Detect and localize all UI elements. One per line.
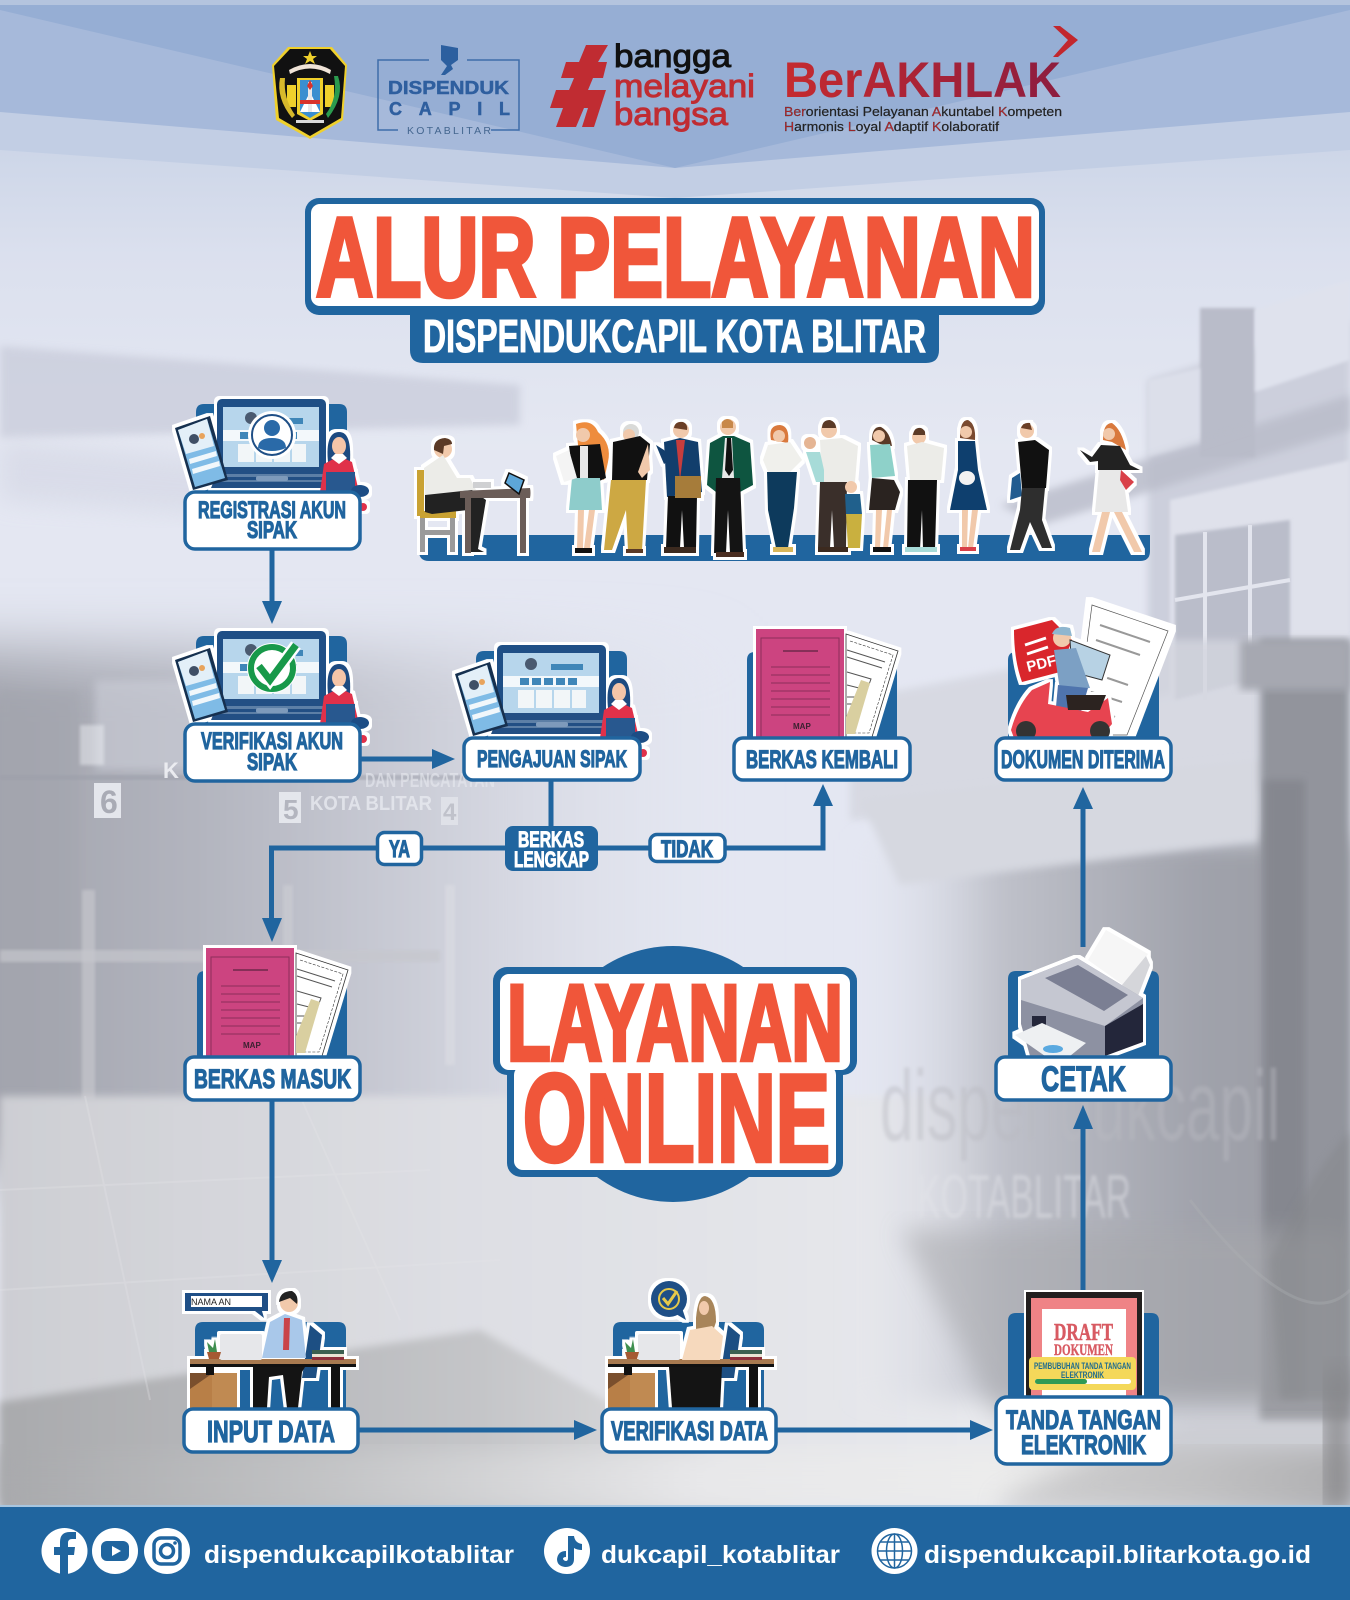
card label xyxy=(185,1057,360,1100)
logo: bangga melayani bangsa: bangga xyxy=(614,38,731,74)
icon: draft document xyxy=(1024,1290,1144,1396)
queue floor bar xyxy=(419,535,1150,561)
backing panel xyxy=(195,1322,346,1409)
person: woman with orange hair xyxy=(556,422,609,553)
icon: folder and papers xyxy=(206,948,348,1056)
background: service counter signs: 4 xyxy=(443,799,457,826)
step: verifikasi akun sipak xyxy=(175,631,369,781)
footer bar xyxy=(0,1505,1350,1600)
logo: BerAKHLAK xyxy=(784,26,1078,134)
person: man in green jacket xyxy=(707,419,753,557)
icon: folder and papers: MAP xyxy=(243,1041,261,1050)
step: input data xyxy=(184,1291,358,1452)
queue scene xyxy=(417,419,1150,561)
icon: tiktok xyxy=(544,1528,590,1574)
card label: REGISTRASI AKUN xyxy=(198,497,346,524)
logo: Dispenduk Capil: KOTABLITAR xyxy=(407,125,491,137)
card label xyxy=(185,492,360,549)
icon: laptop, phone and woman xyxy=(175,631,369,743)
backing panel xyxy=(1008,652,1159,738)
decision: berkas lengkap: BERKAS xyxy=(518,827,584,852)
background: service counter signs: DAN PENCATATAN xyxy=(365,770,495,792)
card label xyxy=(464,738,640,780)
icon: staff typing at desk xyxy=(190,1291,356,1408)
card label xyxy=(184,1409,358,1452)
arrow: verifikasi data to tanda tangan xyxy=(777,1420,993,1440)
icon: green check badge xyxy=(247,643,297,693)
decision: berkas lengkap xyxy=(505,826,598,872)
logo: BerAKHLAK: BerAKHLAK xyxy=(784,52,1061,108)
icon: draft document: DRAFT xyxy=(1054,1320,1113,1346)
person: woman in white top xyxy=(763,425,802,552)
icon: youtube xyxy=(92,1528,138,1574)
person: man in white tee xyxy=(905,428,944,552)
logo: bangga melayani bangsa: melayani xyxy=(614,68,755,104)
arrow: verifikasi akun to pengajuan xyxy=(360,749,455,769)
arrow: registrasi to verifikasi akun xyxy=(262,548,282,624)
icon: draft document: PEMBUBUHAN TANDA TANGAN xyxy=(1034,1361,1131,1372)
card label xyxy=(734,738,910,780)
card label xyxy=(996,738,1171,780)
subtitle bar xyxy=(410,300,939,363)
logo: BerAKHLAK: Berorientasi Pelayanan Akuntabel Kompeten xyxy=(784,105,1062,119)
background: ghost building sign: KOTABLITAR xyxy=(917,1163,1131,1232)
background: left building bands xyxy=(0,346,1350,1510)
logo: bangga melayani bangsa xyxy=(550,38,755,132)
header logos xyxy=(272,26,1078,139)
arrow: tidak to berkas kembali xyxy=(597,784,833,850)
subtitle bar: DISPENDUKCAPIL KOTA BLITAR xyxy=(423,310,926,362)
person: man in navy suit xyxy=(656,422,702,553)
icon: draft document: ELEKTRONIK xyxy=(1061,1370,1104,1381)
person: seated officer at desk xyxy=(417,438,530,553)
background: service counter signs xyxy=(94,758,495,826)
icon: globe xyxy=(872,1528,918,1574)
badge: layanan online xyxy=(493,946,857,1202)
label: tidak: TIDAK xyxy=(661,836,713,863)
backing panel xyxy=(196,404,347,492)
person: father with baby and child xyxy=(804,420,862,552)
logo: Dispenduk Capil: CAPIL xyxy=(389,99,510,119)
background: ghost building sign xyxy=(880,1050,1280,1232)
card label: INPUT DATA xyxy=(207,1414,335,1449)
person: woman in navy dress xyxy=(950,420,987,551)
person: woman in teal top xyxy=(869,427,900,552)
card label xyxy=(602,1409,776,1452)
background: service counter signs: 5 xyxy=(283,794,299,825)
background: right building xyxy=(850,280,1350,1510)
step: dokumen diterima xyxy=(996,600,1173,780)
heading lozenge: LAYANAN xyxy=(507,962,843,1083)
people queue xyxy=(417,419,1142,557)
backing panel xyxy=(196,636,347,724)
logo: Dispenduk Capil xyxy=(378,45,519,137)
step: cetak xyxy=(996,930,1171,1100)
logo: Dispenduk Capil: DISPENDUK xyxy=(388,77,510,98)
label: ya xyxy=(378,832,422,864)
icon: staff in hijab at desk xyxy=(608,1296,774,1408)
icon: signed document xyxy=(1072,600,1173,738)
icon: folder and papers: MAP xyxy=(793,722,811,731)
decision: berkas lengkap: LENGKAP xyxy=(514,847,589,872)
card label: VERIFIKASI AKUN xyxy=(201,728,343,755)
main title: ALUR PELAYANAN xyxy=(316,195,1035,320)
step: pengajuan sipak xyxy=(455,645,649,780)
icon: courier on scooter with PDF: PDF xyxy=(1025,652,1058,676)
badge plate xyxy=(493,967,857,1177)
icon: courier on scooter with PDF xyxy=(1011,620,1112,741)
text: website: dispendukcapil.blitarkota.go.id xyxy=(924,1541,1311,1569)
background: service counter signs: K xyxy=(163,758,179,783)
backing panel xyxy=(476,651,627,738)
card label: BERKAS KEMBALI xyxy=(746,746,898,774)
backing panel xyxy=(1008,1313,1159,1396)
icon: draft document: DOKUMEN xyxy=(1054,1342,1113,1359)
card label: DOKUMEN DITERIMA xyxy=(1001,746,1165,774)
icon: folder and papers xyxy=(756,629,898,737)
badge disc xyxy=(545,946,801,1202)
flow connectors xyxy=(262,548,1093,1440)
arrow: ya to berkas masuk xyxy=(262,846,505,942)
person: woman walking in white skirt xyxy=(1080,423,1142,552)
title banner xyxy=(305,195,1045,363)
icon: instagram xyxy=(144,1528,190,1574)
card label: VERIFIKASI DATA xyxy=(611,1416,768,1446)
logo: bangga melayani bangsa: bangsa xyxy=(614,96,728,132)
heading lozenge: ONLINE xyxy=(523,1050,830,1188)
card label: PENGAJUAN SIPAK xyxy=(477,746,627,773)
title plate xyxy=(305,198,1045,315)
logo: BerAKHLAK: Harmonis Loyal Adaptif Kolaboratif xyxy=(784,120,1000,134)
icon: laptop, phone and woman xyxy=(175,399,369,511)
background: service counter signs: 6 xyxy=(100,784,118,820)
background: service counter signs: KOTA BLITAR xyxy=(310,793,433,815)
card label xyxy=(996,1397,1171,1464)
person: man walking in black jacket xyxy=(1010,423,1052,550)
card label: SIPAK xyxy=(247,749,297,776)
backing panel xyxy=(747,652,897,738)
text: tiktok handle: dukcapil_kotablitar xyxy=(601,1541,840,1569)
backing panel xyxy=(613,1322,764,1409)
icon: facebook xyxy=(42,1528,88,1574)
arrow: berkas masuk to input data xyxy=(262,1100,282,1283)
icon: approval bubble xyxy=(651,1281,687,1320)
icon: user badge xyxy=(248,411,296,459)
icon: name speech bubble: NAMA AN xyxy=(191,1297,231,1307)
step: tanda tangan elektronik xyxy=(996,1290,1171,1464)
icon: name speech bubble xyxy=(185,1293,268,1318)
card label: BERKAS MASUK xyxy=(194,1064,351,1094)
connector: pengajuan to berkas lengkap xyxy=(548,780,554,830)
label: ya: YA xyxy=(389,836,410,863)
text: instagram handle: dispendukcapilkotablitar xyxy=(204,1541,514,1569)
step: verifikasi data xyxy=(602,1281,776,1452)
card label xyxy=(185,724,360,781)
heading lozenge xyxy=(507,962,843,1188)
background: top chevrons xyxy=(0,0,1350,198)
central berkas lengkap decision xyxy=(378,826,725,872)
step: registrasi akun sipak xyxy=(175,399,369,549)
card label: SIPAK xyxy=(247,517,297,544)
backing panel xyxy=(1008,971,1159,1057)
icon: printer xyxy=(1015,930,1150,1056)
card label: CETAK xyxy=(1041,1060,1126,1099)
arrow: input data to verifikasi data xyxy=(358,1420,597,1440)
card label: TANDA TANGAN xyxy=(1006,1405,1161,1435)
arrow: cetak to dokumen diterima xyxy=(1073,787,1093,947)
step: berkas kembali xyxy=(734,629,910,780)
card label xyxy=(996,1057,1171,1100)
logo: Kota Blitar coat of arms xyxy=(272,47,347,139)
backing panel xyxy=(197,971,347,1057)
step: berkas masuk xyxy=(185,948,360,1100)
card label: ELEKTRONIK xyxy=(1021,1430,1146,1460)
arrow: tanda tangan to cetak xyxy=(1073,1105,1093,1292)
icon: laptop, phone and woman xyxy=(455,645,649,757)
person: old man in black tee xyxy=(604,424,650,553)
